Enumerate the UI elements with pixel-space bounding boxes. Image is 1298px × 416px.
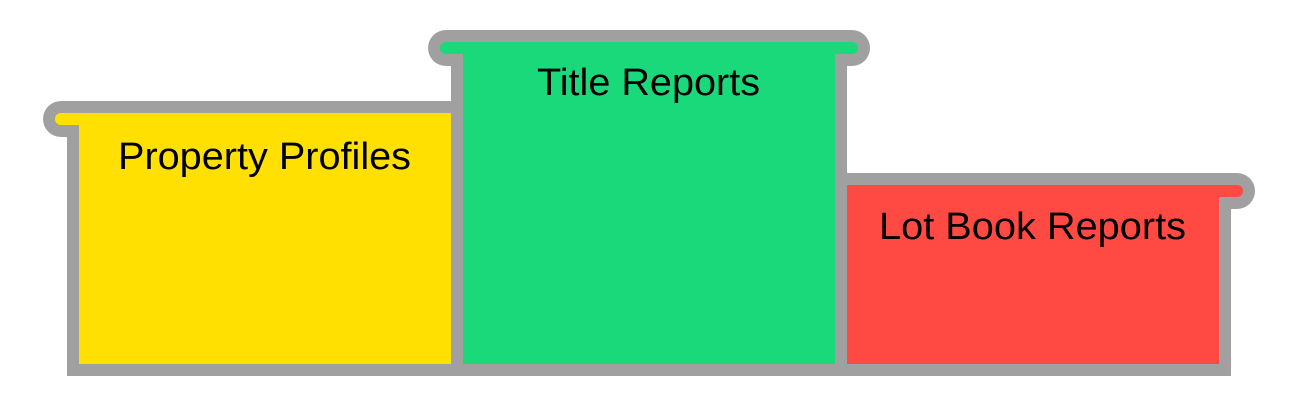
panel: title reports: Title Reports (537, 62, 760, 104)
panel: property profiles (55, 113, 451, 364)
panel: lot book reports (847, 185, 1243, 364)
panel: lot book reports: Lot Book Reports (879, 206, 1186, 248)
panel: title reports (440, 42, 858, 364)
podium outline (43, 30, 1255, 376)
panel: property profiles: Property Profiles (118, 136, 411, 178)
